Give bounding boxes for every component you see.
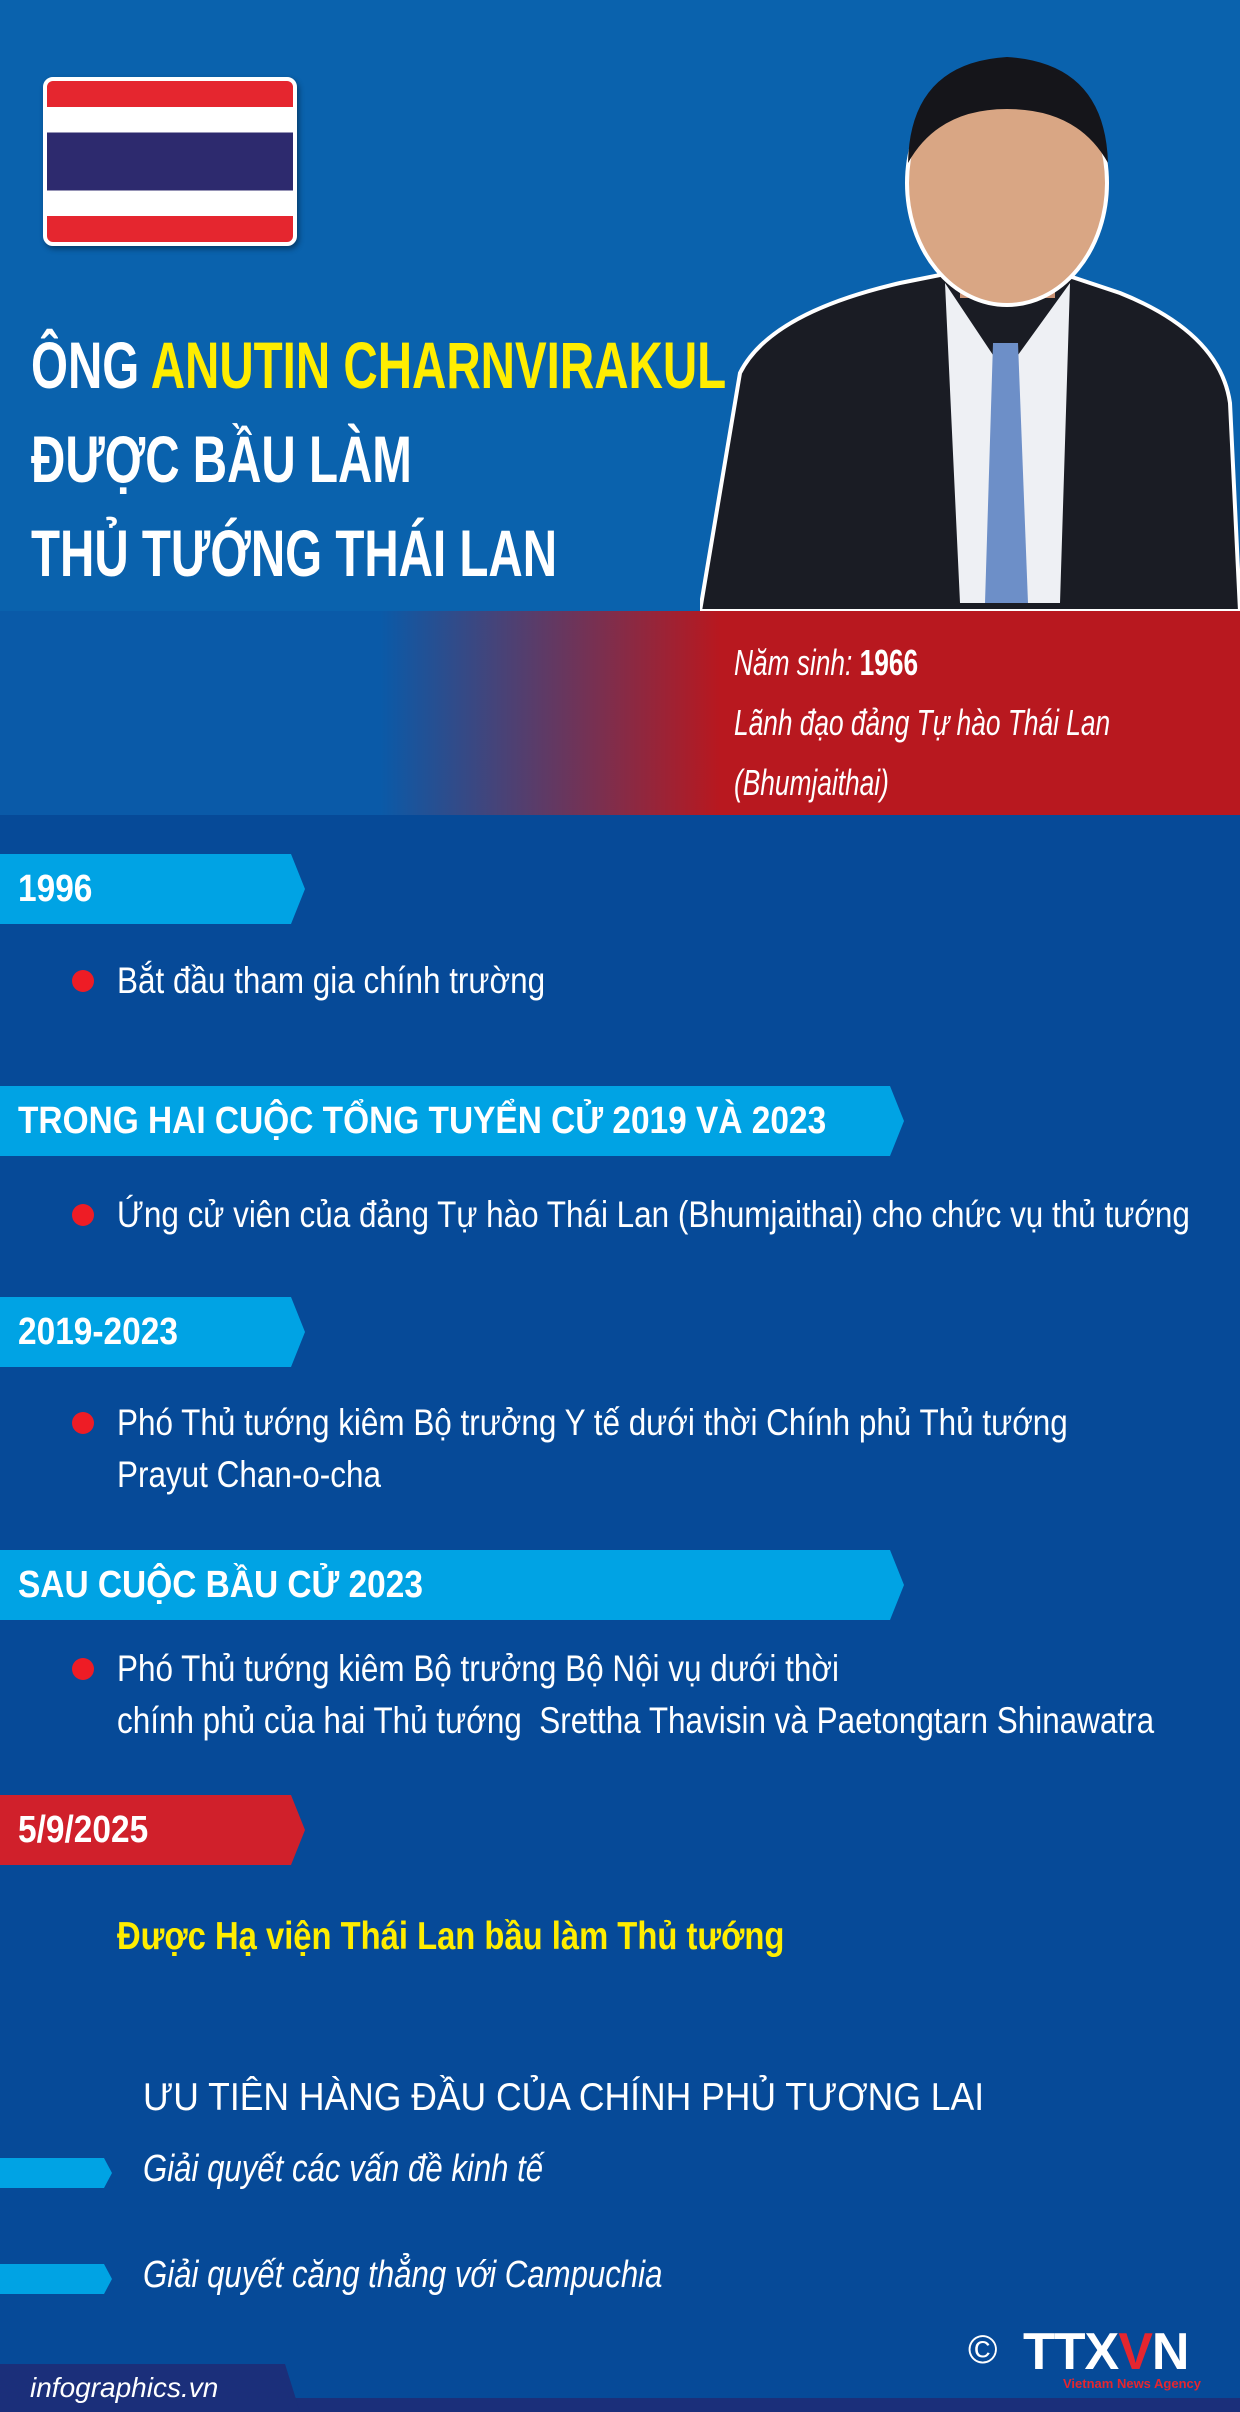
photo: portrait bbox=[700, 57, 1240, 611]
logo TTXVN: TTXVN bbox=[1023, 2323, 1188, 2381]
timeline: 1996 bbox=[0, 854, 305, 924]
highlight text: Được Hạ viện Thái Lan bầu làm Thủ tướng bbox=[117, 1915, 784, 1958]
info text: Lãnh đạo đảng Tự hào Thái Lan bbox=[734, 702, 1110, 743]
bullet 4 bbox=[72, 1648, 1154, 1741]
red info band bbox=[0, 611, 1240, 815]
info text: Năm sinh: 1966 bbox=[734, 642, 918, 683]
timeline: sau 2023: SAU CUỘC BẦU CỬ 2023 bbox=[18, 1564, 423, 1606]
timeline: 1996: 1996 bbox=[18, 868, 92, 910]
bullet 4: Phó Thủ tướng kiêm Bộ trưởng Bộ Nội vụ dưới thời bbox=[117, 1648, 839, 1689]
timeline: 2019 va 2023 bbox=[0, 1086, 904, 1156]
footer bar bbox=[0, 2398, 1240, 2412]
bullet 2: Ứng cử viên của đảng Tự hào Thái Lan (Bhumjaithai) cho chức vụ thủ tướng bbox=[117, 1194, 1190, 1235]
info text bbox=[734, 642, 1110, 803]
bullet 4: chính phủ của hai Thủ tướng Srettha Thavisin và Paetongtarn Shinawatra bbox=[117, 1700, 1154, 1741]
priorities heading: ƯU TIÊN HÀNG ĐẦU CỦA CHÍNH PHỦ TƯƠNG LAI bbox=[143, 2076, 984, 2119]
timeline: 5/9/2025 bbox=[0, 1795, 305, 1865]
footer tab: infographics.vn bbox=[30, 2372, 218, 2403]
priority 2: Giải quyết căng thẳng với Campuchia bbox=[143, 2254, 662, 2296]
timeline: 5/9/2025: 5/9/2025 bbox=[18, 1809, 148, 1851]
bullet 1: Bắt đầu tham gia chính trường bbox=[117, 960, 545, 1001]
title: ĐƯỢC BẦU LÀM bbox=[31, 422, 412, 496]
footer tab bbox=[0, 2364, 296, 2403]
logo TTXVN: © bbox=[968, 2328, 997, 2372]
info text: (Bhumjaithai) bbox=[734, 762, 889, 803]
timeline: 2019-2023: 2019-2023 bbox=[18, 1311, 178, 1353]
logo TTXVN: Vietnam News Agency bbox=[1063, 2376, 1201, 2391]
logo TTXVN bbox=[968, 2323, 1201, 2391]
flag bbox=[43, 77, 297, 246]
title: THỦ TƯỚNG THÁI LAN bbox=[31, 516, 557, 590]
timeline: 2019-2023 bbox=[0, 1297, 305, 1367]
bullet 3: Prayut Chan-o-cha bbox=[117, 1454, 381, 1495]
timeline: 2019 va 2023: TRONG HAI CUỘC TỔNG TUYỂN CỬ 2019 VÀ 2023 bbox=[18, 1100, 826, 1142]
bullet 3: Phó Thủ tướng kiêm Bộ trưởng Y tế dưới thời Chính phủ Thủ tướng bbox=[117, 1402, 1068, 1443]
title bbox=[31, 328, 726, 590]
bullet 3 bbox=[72, 1402, 1068, 1495]
title: ÔNG ANUTIN CHARNVIRAKUL bbox=[31, 328, 726, 402]
priority 1: Giải quyết các vấn đề kinh tế bbox=[143, 2148, 543, 2190]
timeline: sau 2023 bbox=[0, 1550, 904, 1620]
